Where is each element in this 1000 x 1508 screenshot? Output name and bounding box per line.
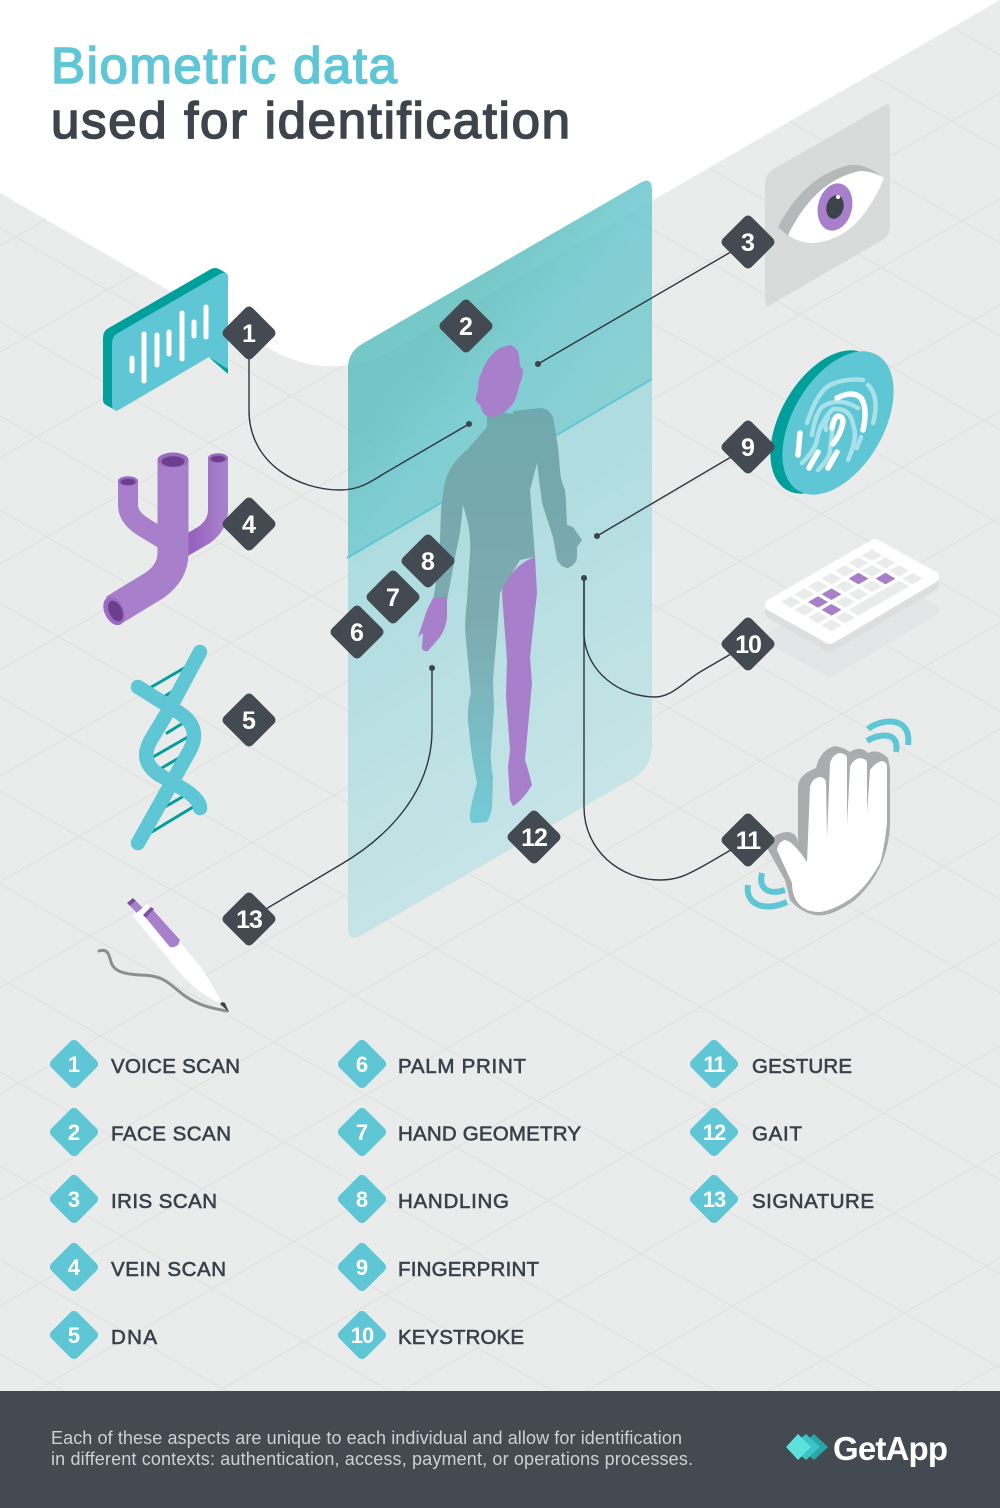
highlighted hand: palm print — [418, 597, 447, 651]
GetApp logo: GetApp — [833, 1430, 948, 1467]
badge 2 — [437, 297, 495, 355]
badge 10: 10 — [735, 631, 761, 659]
legend item 4: 4 — [68, 1255, 81, 1280]
connector 11 — [584, 578, 748, 880]
legend item 3 — [48, 1173, 217, 1225]
badge 5 — [220, 691, 278, 749]
badge 3 — [719, 213, 777, 271]
legend item 1: VOICE SCAN — [111, 1055, 240, 1078]
legend item 2: 2 — [68, 1120, 80, 1145]
legend item 13: SIGNATURE — [752, 1190, 874, 1213]
hand back — [767, 746, 890, 915]
icon: gesture hand — [748, 722, 908, 915]
legend item 7 — [336, 1106, 581, 1158]
badge 7: 7 — [386, 584, 400, 612]
human body silhouette — [418, 345, 582, 823]
badge 13: 13 — [236, 906, 262, 934]
badge 11 — [719, 811, 777, 869]
legend item 7: HAND GEOMETRY — [398, 1122, 581, 1146]
icon: iris scan eye — [765, 104, 890, 306]
legend item 8: 8 — [356, 1187, 368, 1212]
icon: signature pen — [99, 898, 229, 1012]
badge 13 — [220, 890, 278, 948]
legend item 7: 7 — [356, 1120, 368, 1145]
body — [433, 408, 582, 823]
title: used for identification — [51, 92, 570, 149]
legend item 5: 5 — [68, 1323, 80, 1348]
connector 13 — [249, 668, 432, 919]
footer — [0, 1391, 1000, 1508]
legend item 9: 9 — [356, 1255, 368, 1280]
icon: vein scan — [99, 452, 228, 629]
badge 6 — [328, 603, 386, 661]
icon: keystroke keypad — [771, 545, 933, 671]
connector 9 — [597, 447, 748, 536]
highlighted head: face scan — [476, 345, 523, 417]
legend item 3: IRIS SCAN — [111, 1190, 217, 1213]
iris — [813, 180, 857, 234]
icon: DNA helix — [138, 652, 200, 843]
legend item 8 — [336, 1173, 509, 1225]
legend item 10: KEYSTROKE — [398, 1326, 524, 1349]
badge 10 — [719, 615, 777, 673]
legend item 3: 3 — [68, 1187, 80, 1212]
footer text: Each of these aspects are unique to each individual and allow for identification — [51, 1428, 682, 1448]
legend item 2: FACE SCAN — [111, 1122, 231, 1146]
icon: voice scan speech bubble — [103, 268, 228, 411]
legend item 4 — [48, 1241, 226, 1293]
connector lines — [249, 242, 748, 919]
legend item 2 — [48, 1106, 231, 1158]
legend item 9: FINGERPRINT — [398, 1258, 539, 1281]
badge 4 — [220, 495, 278, 553]
badge 2: 2 — [459, 313, 473, 341]
legend item 10: 10 — [351, 1323, 374, 1348]
scanner upper glass — [348, 181, 652, 558]
legend item 13: 13 — [703, 1187, 726, 1212]
legend item 11: GESTURE — [752, 1055, 852, 1078]
badge 6: 6 — [350, 619, 364, 647]
motion waves — [748, 722, 908, 907]
connector dots — [429, 361, 600, 671]
connector 3 — [538, 242, 748, 364]
legend item 12: 12 — [703, 1120, 726, 1145]
badge 1 — [220, 304, 278, 362]
legend item 5: DNA — [111, 1326, 157, 1349]
legend item 8: HANDLING — [398, 1190, 509, 1213]
highlighted leg: gait — [502, 557, 537, 806]
title: Biometric data — [51, 37, 398, 94]
hand front — [777, 753, 887, 912]
connector 10 — [584, 578, 748, 697]
legend item 9 — [336, 1241, 539, 1293]
badges on illustration — [220, 213, 777, 948]
badge 9 — [719, 418, 777, 476]
connector 1 — [249, 333, 469, 490]
legend item 1 — [48, 1038, 240, 1090]
icon: fingerprint — [747, 331, 917, 514]
legend item 1: 1 — [68, 1052, 80, 1077]
legend item 11 — [688, 1038, 852, 1090]
legend item 11: 11 — [703, 1052, 725, 1077]
legend item 10 — [336, 1309, 524, 1361]
badge 8 — [399, 532, 457, 590]
legend item 4: VEIN SCAN — [111, 1258, 226, 1281]
badge 5: 5 — [242, 707, 256, 735]
badge 8: 8 — [421, 548, 435, 576]
title — [51, 37, 570, 149]
legend item 13 — [688, 1173, 874, 1225]
legend item 6: 6 — [356, 1052, 368, 1077]
badge 9: 9 — [741, 434, 755, 462]
badge 12: 12 — [521, 824, 547, 852]
legend item 6: PALM PRINT — [398, 1055, 526, 1078]
pupil — [824, 193, 846, 221]
footer text: in different contexts: authentication, access, payment, or operations processes. — [51, 1449, 693, 1469]
footer text — [51, 1428, 693, 1469]
badge 12 — [505, 808, 563, 866]
scan line — [347, 379, 652, 558]
badge 1: 1 — [242, 320, 256, 348]
legend item 6 — [336, 1038, 526, 1090]
badge 3: 3 — [741, 229, 755, 257]
badge 11: 11 — [736, 827, 761, 855]
badge 4: 4 — [242, 511, 256, 539]
legend item 5 — [48, 1309, 157, 1361]
eye backdrop — [765, 104, 890, 306]
legend item 12: GAIT — [752, 1122, 802, 1146]
legend — [48, 1038, 874, 1361]
scanner lower glass — [348, 379, 652, 938]
panel: body scanner — [347, 181, 652, 938]
legend item 12 — [688, 1106, 802, 1158]
badge 7 — [364, 568, 422, 626]
